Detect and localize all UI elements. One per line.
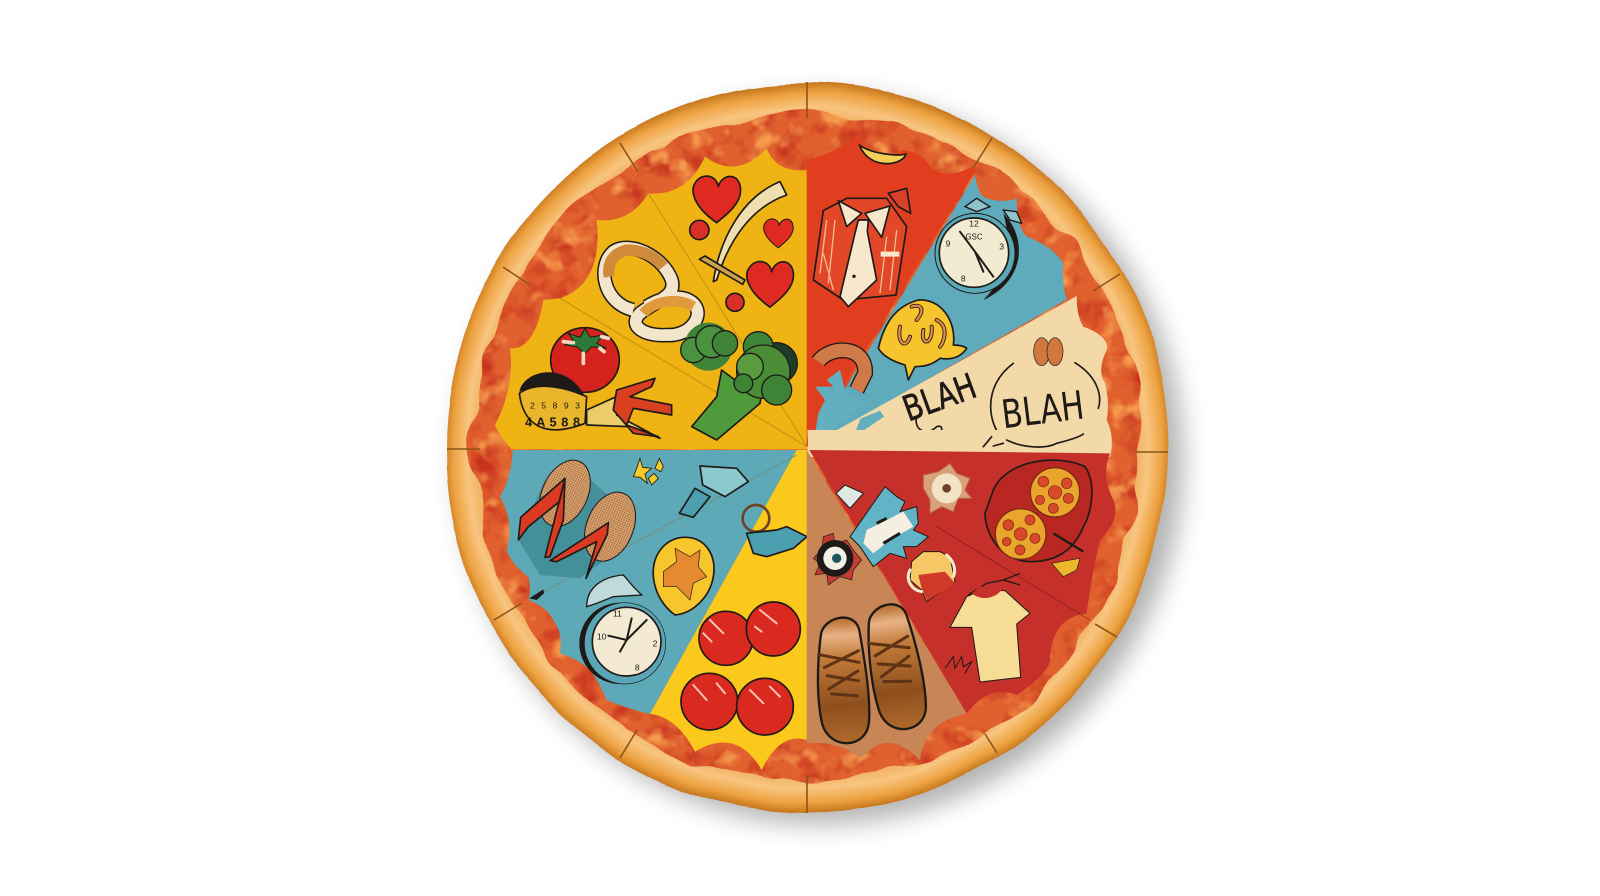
drop shadow — [459, 96, 1183, 824]
slice: red suit background — [807, 136, 975, 447]
icon: alarm clock: 11 — [613, 609, 622, 619]
slice: blue footwear background — [500, 450, 797, 714]
icon: tape measure roll — [519, 372, 587, 430]
slice: yellow tomato background — [650, 450, 807, 770]
icon: blue pocket watch: 8 — [961, 274, 966, 284]
icon: scribbled signature — [945, 657, 972, 673]
icon: large heart — [693, 176, 741, 223]
icon: blue pocket watch: 12 — [969, 219, 979, 229]
quadrant: top left health slices — [495, 148, 807, 449]
icon: alarm clock: 2 — [653, 639, 658, 649]
slice divider lines — [560, 193, 807, 447]
icon: speech bubble with curls — [878, 300, 967, 380]
icon: jigsaw puzzle piece — [850, 487, 928, 567]
icon: small gear — [813, 533, 862, 585]
icon: ruler bar — [699, 256, 745, 284]
label: handwritten BLAH: BLAH — [898, 367, 982, 430]
icon: tape tail with red clip — [587, 378, 672, 438]
icon: beer mug — [908, 552, 955, 602]
icon: gold collar piece — [859, 145, 906, 164]
icon: pizzas on peel — [985, 460, 1092, 562]
icon: orange horseshoe — [818, 350, 865, 390]
icon: small orange twin shape — [1034, 338, 1063, 366]
icon: small paper label — [836, 485, 863, 508]
icon: bubble arcs around BLAH — [991, 363, 1100, 432]
slice divider line — [528, 455, 797, 600]
icon: yellow base of pizza peel — [1052, 558, 1080, 577]
icon: tape measure roll: 4 A 5 8 8 — [525, 416, 580, 430]
icon: blue puzzle piece — [813, 370, 867, 443]
icon: jagged blue tip — [853, 411, 884, 437]
label: handwritten BLAH in bubble: BLAH — [999, 383, 1087, 438]
quadrant: bottom right slices — [807, 430, 1116, 760]
quadrant: top right slices — [807, 136, 1112, 457]
icon: right boot — [862, 601, 930, 733]
tomato sauce ring — [473, 112, 1141, 784]
icon: yellow stars — [633, 458, 663, 485]
icon: cream cog — [923, 463, 972, 513]
slice: cream talk background — [807, 296, 1112, 457]
icon: alarm clock: 10 — [597, 631, 607, 641]
icon: alarm clock — [579, 575, 666, 684]
icon: striped waistcoat — [813, 198, 907, 307]
icon: broccoli — [681, 323, 797, 440]
icon: blue tool hammer — [679, 466, 807, 557]
quadrant: bottom left slices — [500, 450, 807, 770]
slice: cream continuation — [807, 430, 1110, 452]
icon: tape measure roll: 2 5 8 9 3 — [530, 400, 580, 410]
icon: berry upper — [690, 220, 709, 240]
icon: small heart — [764, 219, 793, 248]
icon: measuring ribbon — [713, 182, 787, 282]
slice: yellow health background — [495, 148, 807, 449]
crust slice seams — [447, 82, 1168, 813]
icon: four tomatoes — [681, 602, 800, 735]
icon: alarm clock: 8 — [635, 663, 640, 673]
icon: orange fruit cross-section — [653, 537, 714, 615]
slice divider line — [937, 527, 1090, 620]
icon: lower heart — [747, 261, 794, 307]
icon: flip flops — [518, 452, 645, 600]
pizza crust — [446, 83, 1168, 813]
icon: blue pocket watch: 3 — [999, 241, 1004, 251]
icon: blue pocket watch: 9 — [946, 239, 951, 249]
icon: yellow t-shirt — [950, 573, 1030, 682]
icon: looped measuring tape — [604, 248, 698, 335]
slice: blue time background — [810, 175, 1067, 447]
icon: blue pocket watch — [935, 198, 1022, 300]
icon: tomato — [551, 328, 619, 392]
slice: brown shoes background — [807, 450, 967, 760]
icon: berry lower — [726, 293, 744, 311]
icon: blue pocket watch: GSC — [965, 232, 983, 241]
label: bubble bottom arcs — [983, 434, 1083, 447]
icon: left boot — [814, 616, 871, 745]
icon: scribble under BLAH — [916, 417, 942, 437]
icon: flower on lapel — [888, 188, 911, 213]
slice: red background — [809, 450, 1116, 713]
